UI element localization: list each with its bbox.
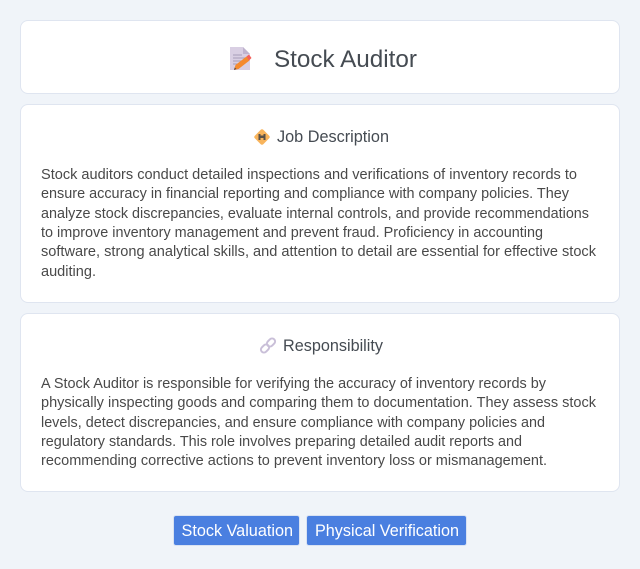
text block: responsibility: regulatory standards. This role involves preparing detailed audit reports and (41, 434, 522, 450)
tag label: Stock Valuation: Stock Valuation (182, 522, 293, 540)
text block: responsibility (41, 376, 597, 469)
heading: job description: Job Description (277, 128, 389, 146)
icon: link (260, 337, 276, 354)
text block: job description (41, 167, 597, 280)
text block: job description: software, strong analytical skills, and attention to detail are essential for effective stock (41, 244, 597, 260)
text block: job description: ensure accuracy in financial reporting and compliance with company policies. They (41, 186, 570, 202)
text block: job description: analyze stock discrepancies, evaluate internal controls, and provide recommendations (41, 206, 589, 222)
text block: job description: auditing. (41, 264, 96, 280)
text block: responsibility: physically inspecting goods and comparing them to documentation. They assess stock (41, 395, 597, 411)
text block: responsibility: A Stock Auditor is responsible for verifying the accuracy of inventory records by (41, 376, 547, 392)
text block: job description: to improve inventory management and prevent fraud. Proficiency in accounting (41, 225, 543, 241)
tag label: Physical Verification: Physical Verification (315, 522, 459, 540)
text block: responsibility: recommending corrective actions to prevent inventory loss or mismanagement. (41, 453, 547, 469)
panel: job description card (20, 104, 620, 303)
icon: construction diamond (254, 129, 270, 145)
tag: Stock Valuation background (174, 516, 299, 545)
tag: Physical Verification background (307, 516, 466, 545)
heading: responsibility: Responsibility (283, 337, 384, 355)
text block: responsibility: levels, detect discrepancies, and ensure compliance with company policies and (41, 415, 545, 431)
title: Stock Auditor (274, 46, 417, 73)
icon: document with pencil (230, 47, 252, 70)
panel: title card (20, 20, 620, 94)
text block: job description: Stock auditors conduct detailed inspections and verifications of inventory records to (41, 167, 577, 183)
panel: responsibility card (20, 313, 620, 492)
